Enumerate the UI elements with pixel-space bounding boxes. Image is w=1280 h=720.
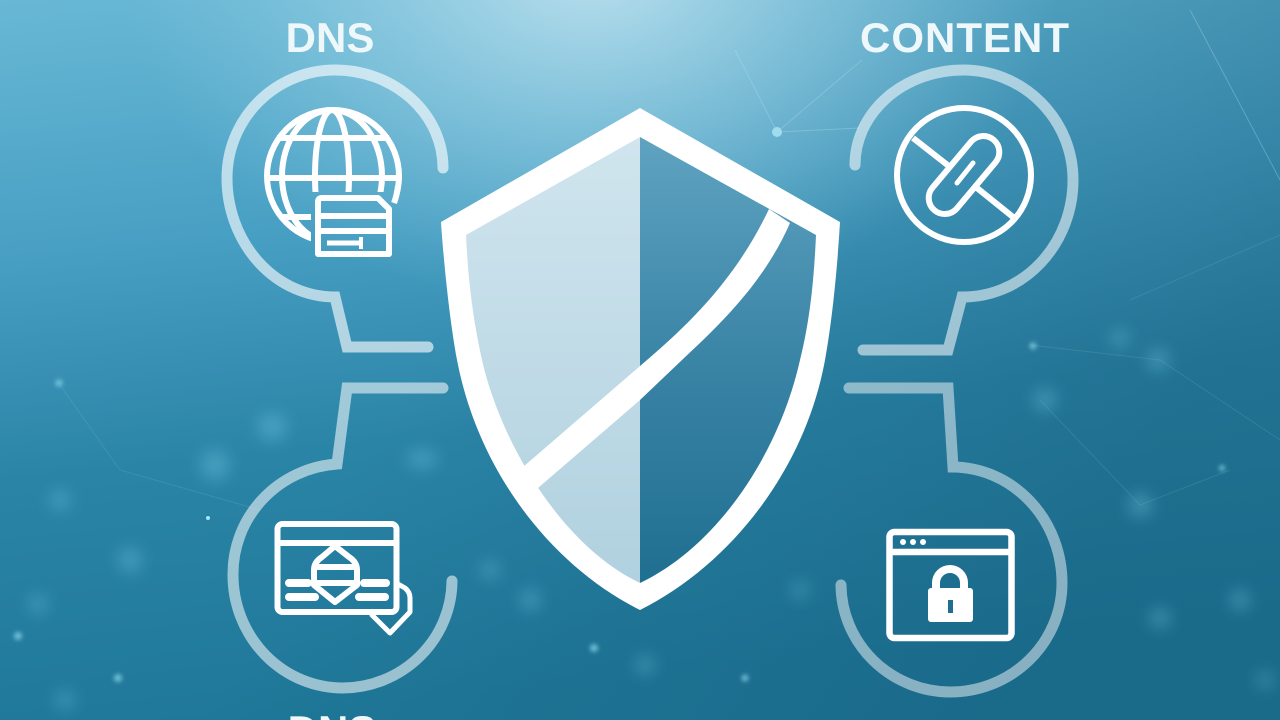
shield [441, 108, 840, 610]
connector ring: top left [227, 70, 443, 347]
shield diagonal band [523, 209, 790, 488]
icon: browser window with padlock [889, 532, 1012, 638]
globe [267, 110, 399, 242]
shield right half [640, 137, 816, 583]
connector ring: bottom right [841, 388, 1062, 692]
heading: CONTENT: CONTENT [860, 14, 1069, 61]
connector ring: bottom left [233, 388, 452, 688]
icon: crossed out paperclip [897, 108, 1031, 242]
server card [318, 198, 389, 254]
heading: DNS top: DNS [286, 14, 374, 61]
shield left half [466, 137, 640, 583]
globe lower right arc [394, 186, 398, 203]
shield outline [441, 108, 840, 610]
icon: globe with server card [267, 110, 399, 254]
icon: browser card with shield and tag [277, 524, 410, 633]
connector ring: top right [855, 70, 1073, 350]
